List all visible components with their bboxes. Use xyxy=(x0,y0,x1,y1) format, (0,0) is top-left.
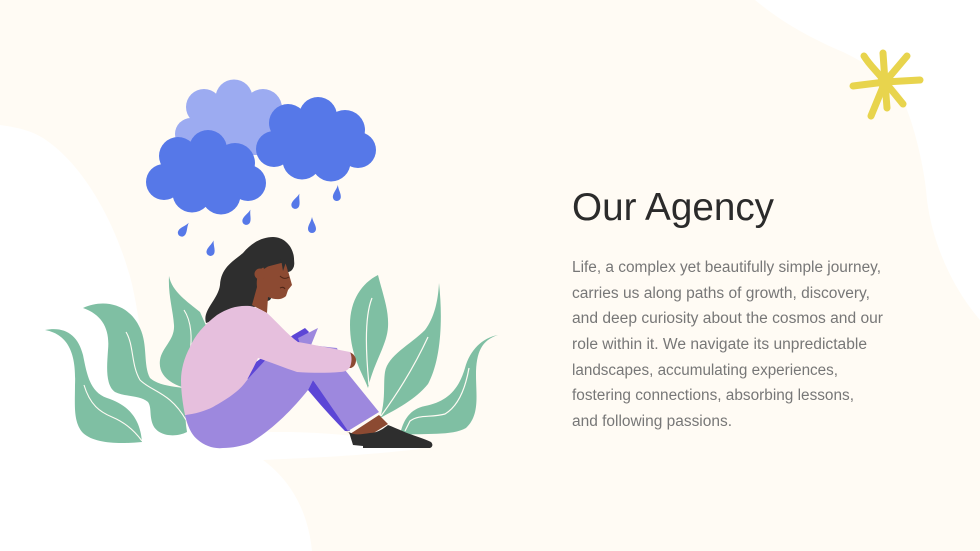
icon: rain drops xyxy=(176,185,342,257)
title: Our Agency xyxy=(572,186,774,229)
woman: closed eye and mouth xyxy=(280,276,289,289)
body paragraph xyxy=(572,259,883,430)
woman: pink sweater xyxy=(181,306,352,415)
leaves: left cluster veins xyxy=(84,310,191,441)
woman: shoe xyxy=(349,425,432,448)
leaves: right cluster veins xyxy=(366,298,469,431)
icon: yellow starburst xyxy=(853,53,920,116)
woman: dark inner leg xyxy=(246,328,309,380)
body paragraph: carries us along paths of growth, discovery, xyxy=(572,285,870,302)
woman: face and neck xyxy=(252,262,292,313)
body paragraph: role within it. We navigate its unpredictable xyxy=(572,336,867,353)
woman: foot xyxy=(345,415,388,437)
body paragraph: and following passions. xyxy=(572,413,732,430)
icon: light back cloud xyxy=(175,80,285,155)
woman: ear xyxy=(254,268,266,280)
body paragraph: landscapes, accumulating experiences, xyxy=(572,362,838,379)
icon: front left cloud xyxy=(146,130,266,214)
woman: shin xyxy=(298,328,379,431)
body paragraph: and deep curiosity about the cosmos and our xyxy=(572,310,883,327)
woman: dark lower leg xyxy=(308,380,350,431)
leaves: left cluster xyxy=(45,276,208,443)
woman: trousers seat and thigh xyxy=(185,345,340,448)
illustration: sad woman in the rain xyxy=(45,80,498,448)
body paragraph: fostering connections, absorbing lessons, xyxy=(572,387,854,404)
leaves: right cluster xyxy=(350,275,498,435)
woman: hair back xyxy=(205,237,294,323)
woman: hand xyxy=(345,352,356,368)
woman: hair fringe xyxy=(262,253,294,272)
icon: front right cloud xyxy=(256,97,376,182)
body paragraph: Life, a complex yet beautifully simple journey, xyxy=(572,259,881,276)
